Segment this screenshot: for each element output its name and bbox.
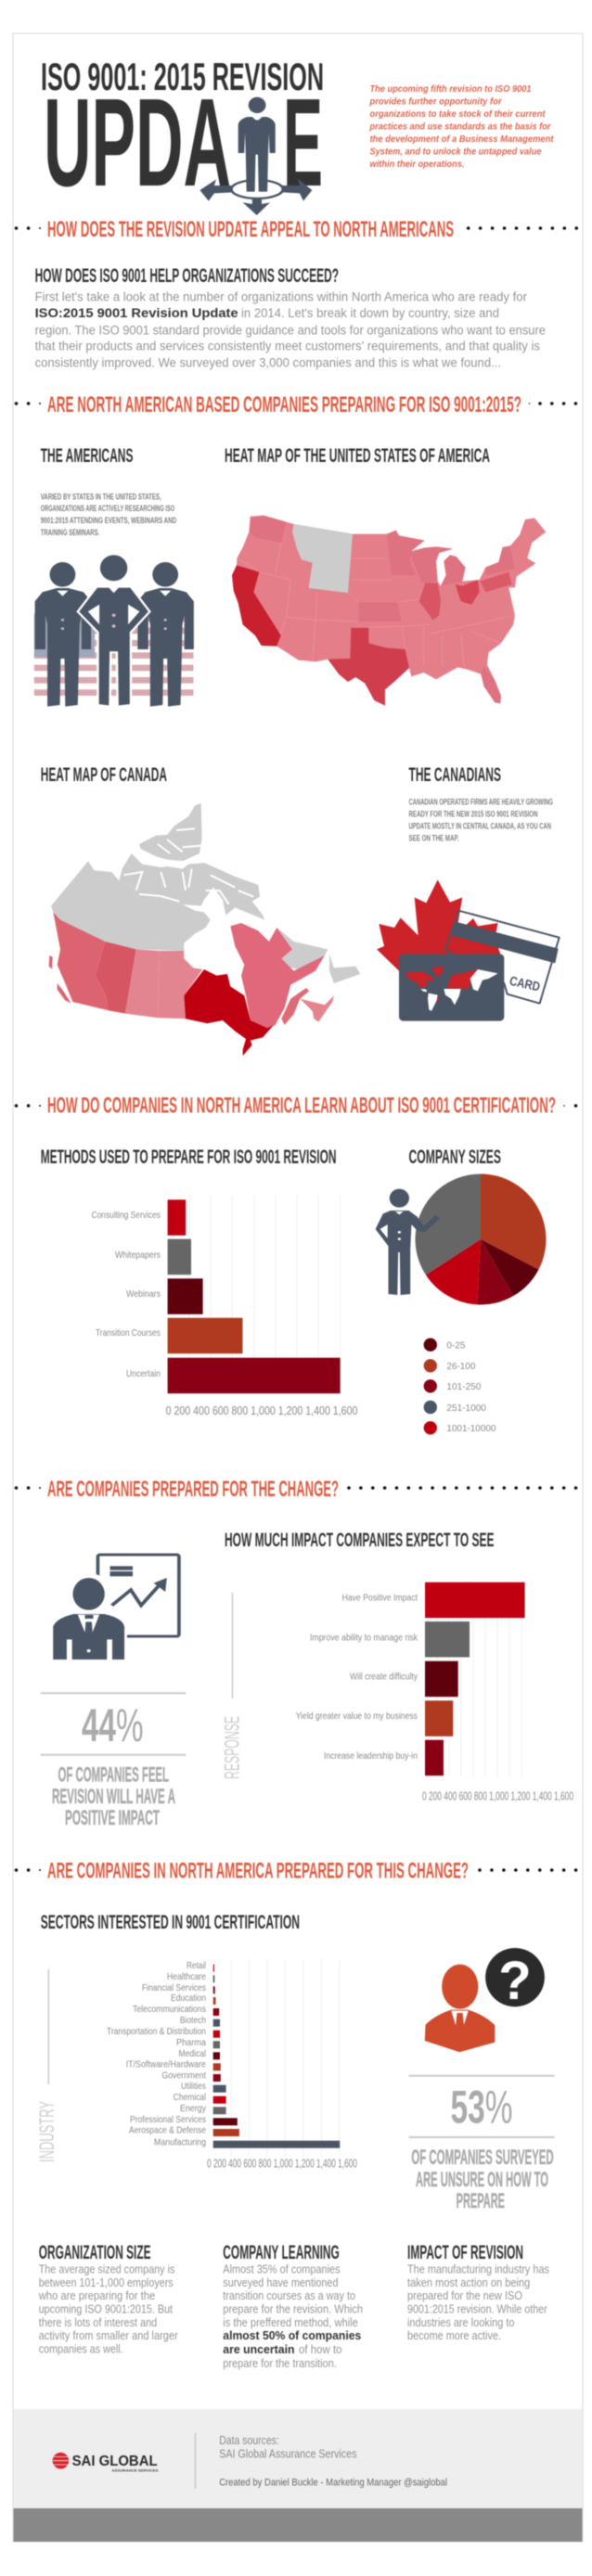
intro text: provides further opportunity for (369, 96, 502, 108)
legend: company sizes: 1001-10000 (446, 1423, 496, 1434)
text: Canadians description (408, 798, 553, 844)
bar chart: expected impact: Will create difficulty (350, 1672, 418, 1683)
intro text: the development of a Business Management (369, 134, 554, 145)
bar chart: methods used: Uncertain (126, 1368, 161, 1379)
panel: footer (13, 2409, 583, 2508)
icon: three businessmen with US flag (34, 555, 194, 707)
heading: the Canadians: THE CANADIANS (408, 763, 501, 786)
bar chart: expected impact: Yield greater value to my business (296, 1711, 418, 1722)
bar chart: sectors: Biotech (180, 2015, 206, 2026)
bar chart: methods used: Transition Courses (96, 1327, 161, 1339)
text block: impact of revision: The manufacturing industry has (407, 2263, 549, 2276)
legend: company sizes: 0-25 (446, 1339, 466, 1351)
axis title: response: RESPONSE (221, 1716, 243, 1779)
section heading: prepared for the change: ARE COMPANIES PREPARED FOR THE CHANGE? (47, 1477, 339, 1502)
text: data sources: Created by Daniel Buckle - Marketing Manager @saiglobal (219, 2477, 447, 2488)
panel: company sizes (376, 1146, 546, 1435)
text block: how ISO 9001 helps: consistently improved. We surveyed over 3,000 companies and this is what we found... (35, 356, 501, 369)
bar chart: sectors: 0 200 400 600 800 1,000 1,200 1,400 1,600 (207, 2156, 357, 2171)
intro text: The upcoming fifth revision to ISO 9001 (369, 83, 532, 95)
text block: organization size (38, 2241, 178, 2356)
text block: how ISO 9001 helps: in 2014. Let's break it down by country, size and (241, 306, 499, 320)
text block: company learning: are uncertain (223, 2343, 295, 2356)
text block: organization size: upcoming ISO 9001:2015. But (39, 2302, 173, 2315)
bar chart: methods used (91, 1195, 357, 1417)
icon: man pointing at pie (376, 1189, 440, 1295)
bar chart: sectors: Medical (178, 2048, 206, 2059)
icon: maple leaf and cards: CARD (508, 973, 542, 994)
text block: impact of revision: 9001:2015 revision. While other (407, 2302, 547, 2315)
heading: the Americans: THE AMERICANS (41, 444, 134, 467)
bar chart: methods used: Whitepapers (115, 1250, 161, 1261)
text: Americans description: TRAINING SEMINARS. (41, 528, 99, 538)
legend: company sizes: 251-1000 (446, 1403, 486, 1414)
white channels between arctic islands (123, 828, 253, 904)
text block: organization size: companies as well. (39, 2343, 123, 2356)
icon: unsure person with question mark (425, 1948, 545, 2052)
bar chart: expected impact: Increase leadership buy-in (324, 1750, 418, 1762)
text: Americans description (41, 492, 176, 538)
text: Americans description: 9001:2015 ATTENDING EVENTS, WEBINARS AND (41, 516, 176, 526)
panel: impact chart (221, 1529, 573, 1803)
text: Canadians description: SEE ON THE MAP. (408, 833, 458, 844)
bar chart: sectors: IT/Software/Hardware (126, 2059, 206, 2070)
panel: Canada heat map (41, 763, 360, 1056)
text block: company learning: is the preffered method, while (223, 2316, 358, 2329)
statistic: 44 percent: 44% (82, 1699, 143, 1751)
panel: US heat map (225, 444, 546, 706)
footer bar (13, 2508, 583, 2542)
bar chart: sectors: Professional Services (130, 2114, 206, 2125)
intro text: organizations to take stock of their current (369, 109, 546, 120)
text: data sources: SAI Global Assurance Services (219, 2447, 357, 2460)
text: unsure caption: PREPARE (457, 2189, 505, 2212)
logo: SAI Global: SAI GLOBAL (72, 2454, 158, 2469)
text block: company learning (223, 2241, 363, 2370)
intro text: within their operations. (369, 159, 465, 170)
bar chart: sectors: Chemical (174, 2092, 206, 2103)
text block: impact of revision: become more active. (407, 2329, 501, 2342)
intro text: System, and to unlock the untapped value (369, 147, 542, 158)
bar chart: sectors: Government (161, 2070, 206, 2082)
title: ISO 9001 2015 revision: ISO 9001: 2015 REVISION (41, 55, 324, 98)
panel: the Canadians (377, 763, 560, 1021)
text block: how ISO 9001 helps: that their products and services consistently meet customers' requirements, and that quality is (35, 340, 540, 352)
statistic: 53 percent: 53% (451, 2082, 512, 2134)
bar chart: methods used: Webinars (126, 1288, 161, 1300)
heading: methods: METHODS USED TO PREPARE FOR ISO 9001 REVISION (41, 1146, 337, 1168)
text block: company learning: transition courses as a way to (223, 2289, 355, 2302)
text block: company learning: of how to (299, 2343, 342, 2356)
text block: company learning: COMPANY LEARNING (223, 2241, 340, 2263)
bar chart: expected impact (296, 1582, 573, 1803)
text block: company learning: prepare for the transition. (223, 2357, 337, 2370)
logo: SAI Global: ASSURANCE SERVICES (111, 2467, 159, 2473)
text block: how ISO 9001 helps: First let's take a look at the number of organizations within North America who are ready for (35, 289, 527, 304)
text block: organization size: there is lots of interest and (39, 2316, 157, 2329)
header: E (283, 72, 323, 212)
bar chart: sectors: Aerospace & Defense (129, 2124, 206, 2135)
text: positive impact caption: REVISION WILL HAVE A (52, 1785, 175, 1808)
text block: organization size: The average sized company is (39, 2263, 174, 2276)
text block: company learning: almost 50% of companies (223, 2329, 361, 2342)
legend: company sizes (424, 1338, 496, 1435)
panel: methods chart (41, 1146, 357, 1417)
icon: unsure person with question mark: ? (498, 1951, 532, 2011)
text block: how ISO 9001 helps: HOW DOES ISO 9001 HELP ORGANIZATIONS SUCCEED? (35, 264, 339, 287)
title: update left letters: UPDA (44, 72, 231, 212)
text block: company learning: Almost 35% of companies (223, 2263, 341, 2276)
text block: how ISO 9001 helps: region. The ISO 9001 standard provide guidance and tools for organizations who want to ensure (35, 323, 546, 338)
bar chart: methods used: 0 200 400 600 800 1,000 1,200 1,400 1,600 (166, 1403, 357, 1417)
axis title: industry: INDUSTRY (35, 2101, 58, 2162)
icon: presenter with growth chart (53, 1555, 179, 1660)
panel: 53 percent callout (408, 1948, 555, 2212)
text: data sources: Data sources: (219, 2433, 279, 2447)
bar chart: sectors: Transportation & Distribution (107, 2026, 206, 2037)
intro text: practices and use standards as the basis for (369, 121, 551, 132)
map: Canada (49, 803, 360, 1056)
text block: impact of revision: prepared for the new ISO (407, 2289, 522, 2302)
logo: SAI Global (53, 2453, 159, 2473)
panel: sectors chart (35, 1911, 357, 2171)
text block: how ISO 9001 helps: ISO:2015 9001 Revision Update (35, 306, 238, 320)
heading: Canada heat map: HEAT MAP OF CANADA (41, 763, 167, 786)
map: United States (232, 516, 546, 706)
heading: sectors: SECTORS INTERESTED IN 9001 CERTIFICATION (41, 1911, 300, 1933)
bar chart: methods used: Consulting Services (91, 1210, 161, 1221)
bar chart: sectors: Education (171, 1993, 206, 2004)
text: positive impact caption: OF COMPANIES FEEL (58, 1763, 169, 1787)
bar chart: sectors: Energy (180, 2103, 207, 2114)
icon: maple leaf and cards (377, 879, 560, 1021)
text block: organization size: activity from smaller and larger (39, 2329, 178, 2342)
text block: organization size: who are preparing for the (38, 2289, 155, 2302)
text block: organization size: ORGANIZATION SIZE (39, 2241, 151, 2263)
intro text (369, 83, 554, 170)
header (41, 55, 554, 215)
text: Americans description: VARIED BY STATES IN THE UNITED STATES, (41, 492, 161, 503)
text block: impact of revision: taken most action on being (407, 2276, 530, 2289)
icon: businessman with arrows (199, 97, 312, 215)
bar chart: expected impact: Improve ability to manage risk (310, 1633, 418, 1644)
text: data sources (219, 2433, 447, 2488)
text block: impact of revision: industries are looking to (407, 2316, 515, 2329)
text block: company learning: prepare for the revision. Which (223, 2302, 363, 2315)
text block: organization size: between 101-1,000 employers (39, 2276, 174, 2289)
bar chart: sectors: Healthcare (167, 1971, 206, 1982)
text: unsure caption (411, 2146, 554, 2212)
pie chart: company sizes (416, 1174, 546, 1304)
text block: company learning: surveyed have mentioned (223, 2276, 339, 2289)
bar chart: sectors: Retail (187, 1960, 206, 1971)
legend: company sizes: 101-250 (446, 1381, 482, 1392)
bar chart: sectors: Financial Services (142, 1982, 206, 1993)
panel: 44 percent callout (41, 1555, 186, 1829)
bar chart: sectors: Manufacturing (154, 2137, 206, 2148)
heading: company sizes: COMPANY SIZES (408, 1146, 501, 1168)
bar chart: expected impact: Have Positive Impact (342, 1592, 418, 1603)
bar chart: sectors: Telecommunications (133, 2004, 206, 2015)
panel: the Americans (34, 444, 194, 707)
text: Americans description: ORGANIZATIONS ARE ACTIVELY RESEARCHING ISO (41, 504, 174, 514)
bar chart: sectors (107, 1959, 357, 2171)
bar chart: sectors: Pharma (176, 2037, 206, 2048)
text block: how ISO 9001 helps (35, 264, 546, 369)
text block: impact of revision (407, 2241, 549, 2342)
text: positive impact caption (52, 1763, 175, 1829)
text: positive impact caption: POSITIVE IMPACT (65, 1806, 160, 1829)
legend: company sizes: 26-100 (446, 1361, 476, 1372)
bar chart: sectors: Utilities (181, 2081, 206, 2092)
